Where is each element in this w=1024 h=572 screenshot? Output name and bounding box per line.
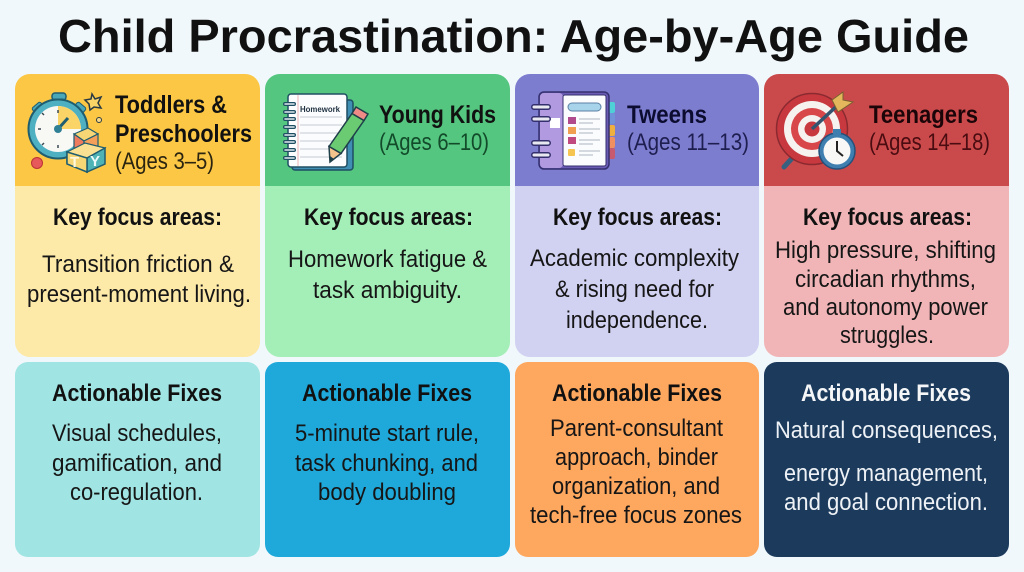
focus panel: teenagers: and autonomy power (783, 294, 988, 321)
icon: stopwatch and blocks (28, 93, 105, 172)
heading: toddlers: Preschoolers (115, 120, 252, 148)
focus panel: toddlers (15, 186, 260, 357)
focus panel: teenagers: circadian rhythms, (795, 266, 976, 293)
fixes panel: toddlers: Visual schedules, (52, 420, 222, 447)
fixes panel: tweens: Actionable Fixes (552, 380, 722, 407)
heading: tweens: (Ages 11–13) (627, 129, 749, 156)
focus panel: toddlers: Transition friction & (42, 251, 234, 278)
heading: tweens: Tweens (627, 101, 707, 129)
fixes panel: tweens (515, 362, 759, 557)
fixes panel: teenagers: and goal connection. (784, 489, 988, 516)
fixes panel: young kids: Actionable Fixes (302, 380, 472, 407)
focus panel: teenagers: Key focus areas: (803, 204, 972, 231)
panel: toddlers column (15, 74, 260, 557)
heading: toddlers: (Ages 3–5) (115, 148, 214, 175)
icon: stopwatch and blocks: T (70, 154, 79, 171)
focus panel: toddlers: Key focus areas: (53, 204, 222, 231)
fixes panel: toddlers: Actionable Fixes (52, 380, 222, 407)
header: toddlers (15, 74, 260, 186)
focus panel: young kids: task ambiguity. (313, 277, 462, 304)
fixes panel: young kids: task chunking, and (295, 450, 478, 477)
heading: toddlers (115, 91, 252, 175)
heading: young kids (379, 101, 496, 156)
icon: homework notebook and pencil (285, 94, 368, 170)
heading: teenagers: Teenagers (869, 101, 978, 129)
fixes panel: young kids: 5-minute start rule, (295, 420, 479, 447)
focus panel: toddlers: present-moment living. (27, 281, 251, 308)
panel: young kids column (265, 74, 510, 557)
fixes panel: tweens: Parent-consultant (550, 415, 723, 442)
fixes panel: teenagers: energy management, (784, 460, 988, 487)
focus panel: tweens: & rising need for (555, 276, 714, 303)
fixes panel: tweens: tech-free focus zones (530, 502, 742, 529)
focus panel: tweens: Academic complexity (530, 245, 740, 272)
header: teenagers (764, 74, 1009, 186)
title: Child Procrastination: Age-by-Age Guide (58, 10, 969, 62)
heading: teenagers: (Ages 14–18) (869, 129, 990, 156)
fixes panel: teenagers: Natural consequences, (775, 417, 998, 444)
heading: toddlers: Toddlers & (115, 91, 227, 119)
focus panel: young kids (265, 186, 510, 357)
panel: teenagers column (764, 74, 1009, 557)
focus panel: teenagers: struggles. (840, 322, 934, 349)
fixes panel: toddlers: gamification, and (52, 450, 222, 477)
header: tweens (515, 74, 759, 186)
fixes panel: teenagers (764, 362, 1009, 557)
heading: young kids: (Ages 6–10) (379, 129, 489, 156)
fixes panel: tweens: organization, and (552, 473, 720, 500)
panel: tweens column (515, 74, 759, 557)
focus panel: teenagers (764, 186, 1009, 357)
focus panel: tweens: Key focus areas: (553, 204, 722, 231)
fixes panel: toddlers: co-regulation. (70, 479, 203, 506)
icon: homework notebook and pencil: Homework (300, 105, 341, 114)
header: young kids (265, 74, 510, 186)
fixes panel: teenagers: Actionable Fixes (801, 380, 971, 407)
fixes panel: tweens: approach, binder (555, 444, 718, 471)
fixes panel: toddlers (15, 362, 260, 557)
focus panel: young kids: Homework fatigue & (288, 246, 487, 273)
icon: stopwatch and blocks: Y (90, 153, 100, 170)
focus panel: tweens: independence. (566, 307, 708, 334)
icon: binder planner (534, 92, 615, 169)
focus panel: tweens (515, 186, 759, 357)
icon: target and clock (776, 92, 855, 169)
heading: teenagers (869, 101, 990, 156)
heading: young kids: Young Kids (379, 101, 496, 129)
fixes panel: young kids (265, 362, 510, 557)
fixes panel: young kids: body doubling (318, 479, 456, 506)
focus panel: young kids: Key focus areas: (304, 204, 473, 231)
heading: tweens (627, 101, 749, 156)
focus panel: teenagers: High pressure, shifting (775, 237, 996, 264)
